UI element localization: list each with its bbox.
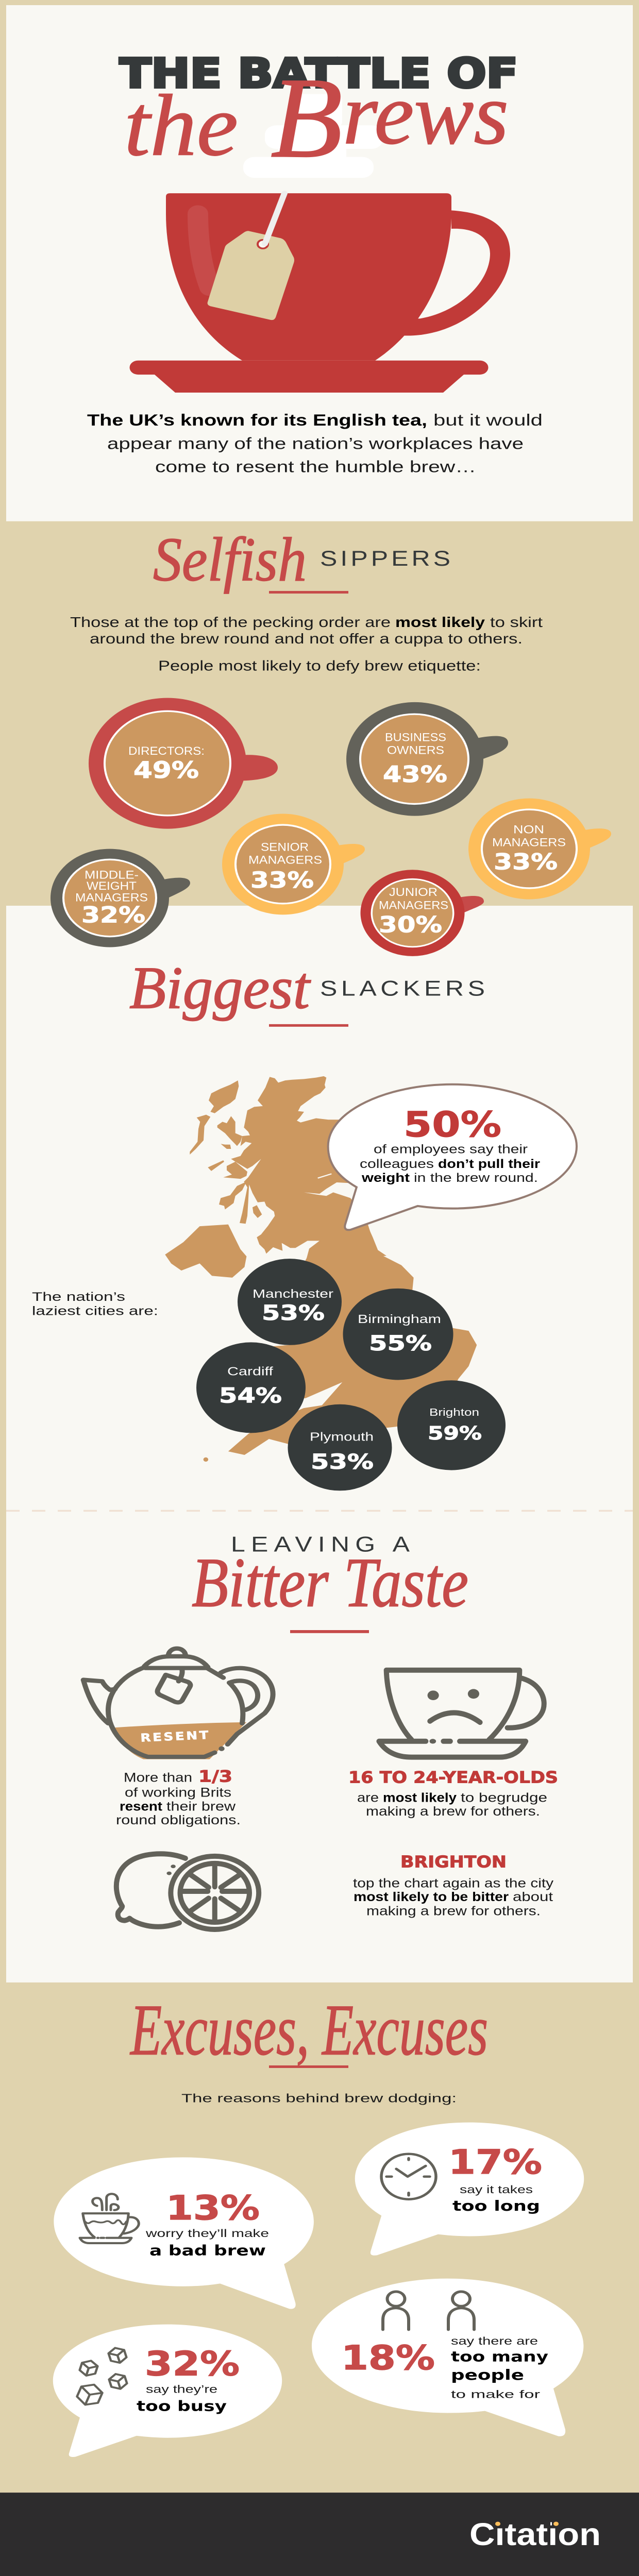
icon: people <box>383 2292 474 2330</box>
excuse: too many people: say there are <box>451 2335 538 2347</box>
panel: biggest slackers and bitter taste background <box>6 906 633 1982</box>
callout: 50 percent of employees: don’t pull their <box>438 1157 540 1171</box>
cup: junior managers: JUNIOR <box>389 886 438 899</box>
city: birmingham <box>343 1289 453 1380</box>
text: more than one third <box>116 1768 241 1827</box>
cup: non managers: NON <box>513 824 544 836</box>
cup: middle-weight managers: MANAGERS <box>75 892 148 904</box>
excuse: too many people: too many <box>451 2349 548 2365</box>
excuse: too busy: 32% <box>145 2344 240 2383</box>
section: biggest slackers <box>32 954 577 1490</box>
intro copy: Those at the top of the pecking order are <box>70 615 391 630</box>
section: excuses excuses <box>53 1990 584 2457</box>
excuse: too many people: people <box>451 2367 524 2383</box>
city: manchester: Manchester <box>253 1287 334 1301</box>
callout: 50 percent of employees: 50% <box>403 1104 501 1145</box>
cup: junior managers: MANAGERS <box>379 900 448 912</box>
cup: middle-weight managers: MIDDLE- <box>85 869 139 882</box>
title: the brews: B <box>271 54 343 182</box>
text: 16 to 24 year olds: making a brew for others. <box>366 1804 540 1819</box>
city: brighton: Brighton <box>429 1406 479 1418</box>
intro copy: to skirt <box>490 615 543 630</box>
text: more than one third: resent <box>120 1799 162 1814</box>
text: brighton: BRIGHTON <box>400 1853 507 1872</box>
cup: senior managers <box>222 814 365 914</box>
text: 16 to 24 year olds: to begrudge <box>461 1790 547 1805</box>
heading: selfish sippers: Selfish <box>153 525 307 594</box>
city: brighton <box>397 1380 506 1470</box>
excuse: too long <box>381 2142 542 2214</box>
cup: middle-weight managers <box>51 849 190 947</box>
panel: hero <box>6 5 633 521</box>
text: brighton: most likely to be bitter <box>354 1890 509 1904</box>
excuse: too long: 17% <box>448 2142 542 2181</box>
icon: lemon <box>116 1854 259 1929</box>
heading: leaving a bitter taste: LEAVING A <box>231 1532 410 1556</box>
intro text <box>87 411 543 476</box>
text: 16 to 24 year olds: most likely <box>383 1790 457 1805</box>
heading: leaving a bitter taste: Bitter Taste <box>192 1544 468 1621</box>
text: 16 to 24 year olds: are <box>357 1790 379 1805</box>
city: plymouth: Plymouth <box>310 1430 374 1444</box>
city: manchester <box>238 1259 342 1345</box>
cup: business owners: BUSINESS <box>385 731 446 744</box>
cup: junior managers: 30% <box>379 912 442 938</box>
callout: 50 percent of employees: in the brew round. <box>414 1171 538 1185</box>
callout: 50 percent of employees: colleagues <box>360 1157 434 1171</box>
excuse: too busy <box>75 2344 240 2415</box>
excuse: too busy: too busy <box>137 2398 227 2415</box>
section: selfish sippers <box>51 525 611 956</box>
text: more than one third: their brew <box>166 1799 236 1814</box>
excuse: too many people <box>341 2292 548 2401</box>
excuse: bad brew: 13% <box>166 2188 260 2227</box>
heading: selfish sippers: SIPPERS <box>320 546 450 570</box>
cup: non managers <box>468 799 611 900</box>
text: 16 to 24 year olds <box>348 1768 558 1819</box>
intro copy: most likely <box>395 615 485 630</box>
icon: steaming cup <box>80 2194 139 2243</box>
excuse: too long: say it takes <box>460 2183 533 2196</box>
excuse: too busy: say they’re <box>146 2383 217 2396</box>
callout: 50 percent of employees: weight <box>361 1171 410 1185</box>
cup: business owners: OWNERS <box>387 744 444 757</box>
heading: biggest slackers: Biggest <box>129 954 311 1021</box>
city: cardiff: 54% <box>219 1384 282 1408</box>
subheading: reasons: The reasons behind brew dodging: <box>181 2092 457 2105</box>
heading: biggest slackers: SLACKERS <box>320 976 485 1000</box>
city: plymouth: 53% <box>311 1450 374 1474</box>
cup: junior managers <box>361 870 484 956</box>
cup: directors: 49% <box>133 756 199 784</box>
cup: directors <box>89 698 278 829</box>
cup: business owners: 43% <box>383 761 447 788</box>
map: united kingdom <box>165 1076 477 1462</box>
intro copy: around the brew round and not offer a cuppa to others. <box>90 632 523 647</box>
text: brighton: about <box>513 1890 553 1904</box>
callout: 50 percent of employees: of employees say their <box>374 1142 528 1156</box>
text: brighton <box>353 1853 553 1918</box>
icon: sugar cubes <box>75 2346 128 2408</box>
intro copy <box>70 615 543 674</box>
city: birmingham: 55% <box>369 1332 432 1355</box>
logo: citation: Citation <box>469 2517 601 2552</box>
text: more than one third: round obligations. <box>116 1812 241 1827</box>
city: manchester: 53% <box>262 1301 325 1325</box>
cup: middle-weight managers: 32% <box>81 903 145 928</box>
excuse: bad brew <box>80 2188 269 2259</box>
intro text: The UK’s known for its English tea, <box>87 411 427 429</box>
city: cardiff: Cardiff <box>227 1365 274 1378</box>
speech bubbles <box>53 2123 584 2457</box>
icon: tea bag tag <box>208 193 294 320</box>
text: brighton: top the chart again as the city <box>353 1876 553 1890</box>
text: laziest cities: The nation’s <box>32 1290 125 1303</box>
intro text: come to resent the humble brew… <box>155 457 476 476</box>
text: brighton: making a brew for others. <box>366 1904 541 1918</box>
city: birmingham: Birmingham <box>358 1313 441 1326</box>
heading: biggest slackers <box>129 954 485 1027</box>
cup: senior managers: 33% <box>250 868 314 893</box>
text: more than one third: More than <box>124 1770 192 1785</box>
footer <box>0 2493 639 2576</box>
text: laziest cities: laziest cities are: <box>32 1304 158 1318</box>
section: leaving a bitter taste <box>83 1532 558 1929</box>
icon: sad cup <box>379 1670 544 1757</box>
text: more than one third: 1/3 <box>198 1768 232 1786</box>
title: the brews: the <box>124 77 238 174</box>
text: more than one third: of working Brits <box>125 1785 231 1800</box>
heading: leaving a bitter taste <box>192 1532 468 1633</box>
icon: teapot <box>83 1649 273 1759</box>
text: laziest cities <box>32 1290 158 1318</box>
excuse: bad brew: a bad brew <box>149 2243 266 2259</box>
heading: selfish sippers <box>153 525 450 594</box>
cup: business owners <box>346 702 508 816</box>
excuse: bad brew: worry they’ll make <box>145 2227 269 2240</box>
city: cardiff <box>196 1342 306 1433</box>
intro copy: People most likely to defy brew etiquette: <box>158 658 481 674</box>
cup: middle-weight managers: WEIGHT <box>87 880 137 893</box>
excuse: too many people: 18% <box>341 2338 435 2377</box>
city: plymouth <box>288 1404 392 1490</box>
cup: non managers: MANAGERS <box>492 837 566 849</box>
city: brighton: 59% <box>428 1422 482 1444</box>
icon: clock <box>381 2154 436 2199</box>
title: the brews: rews <box>343 65 509 162</box>
cup: senior managers: MANAGERS <box>248 854 322 867</box>
cup: non managers: 33% <box>494 850 558 875</box>
steam <box>243 94 383 178</box>
label: resent: RESENT <box>140 1728 209 1744</box>
title: the battle of: THE BATTLE OF <box>120 49 518 97</box>
intro text: appear many of the nation’s workplaces have <box>107 435 524 453</box>
excuse: too long: too long <box>452 2198 540 2214</box>
text: 16 to 24 year olds: 16 TO 24-YEAR-OLDS <box>348 1768 558 1787</box>
cup: senior managers: SENIOR <box>261 841 309 854</box>
excuse: too many people: to make for <box>451 2388 540 2401</box>
icon: red teacup with saucer <box>130 193 510 393</box>
intro text: but it would <box>433 411 543 429</box>
cup: directors: DIRECTORS: <box>128 745 205 757</box>
callout: 50 percent of employees <box>328 1084 577 1230</box>
